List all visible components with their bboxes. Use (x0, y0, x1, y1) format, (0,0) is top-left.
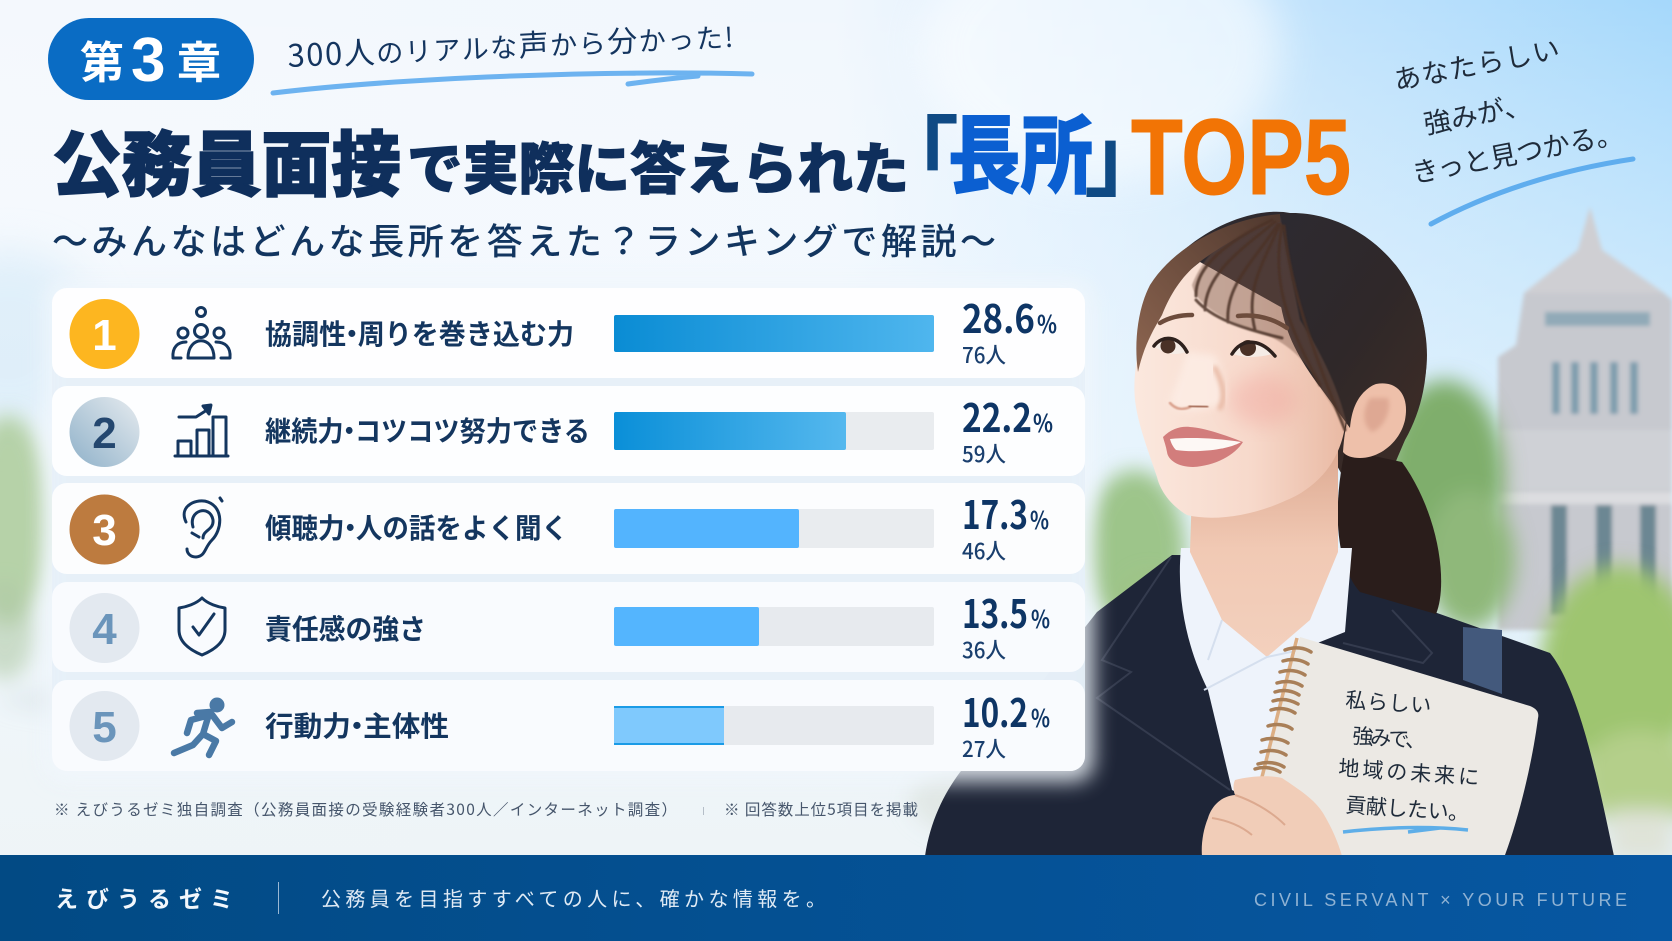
mouth (1163, 427, 1243, 467)
value: 10.2 (962, 683, 1028, 739)
footnotes: ※ 回答数上位5項目を掲載 (724, 798, 918, 820)
blazer (925, 555, 1614, 856)
chapter badge: 3 (131, 26, 165, 95)
main title: 」 (1084, 88, 1172, 215)
value (962, 388, 1053, 469)
subheading: 〜みんなはどんな長所を答えた？ランキングで解説〜 (52, 213, 996, 265)
tagline: 公務員を目指すすべての人に、確かな情報を。 (321, 883, 826, 912)
notebook spine (1262, 638, 1297, 777)
face (1134, 262, 1346, 518)
value: 17.3 (962, 485, 1028, 541)
value: % (1030, 501, 1049, 536)
value: % (1033, 404, 1053, 439)
nose shadow (1170, 352, 1224, 411)
ear (1343, 383, 1406, 458)
icon: bars (175, 405, 228, 456)
label: 協調性・周りを巻き込む力 (265, 313, 574, 353)
rank badge 3: 3 (92, 506, 117, 555)
rank badge 2 (70, 397, 140, 467)
rank badge 1 (70, 299, 140, 369)
handwritten subtitle: 300人のリアルな声から分かった! (286, 11, 734, 76)
notebook handwriting: 貢献したい。 (1345, 794, 1470, 826)
notebook spiral (1255, 648, 1311, 772)
label: 行動力・主体性 (265, 705, 449, 745)
bar (614, 412, 934, 450)
hand (1202, 776, 1342, 856)
rank badge 5 (70, 691, 140, 761)
woman holding notebook (925, 212, 1614, 856)
main title (52, 88, 1351, 217)
value: 46人 (962, 534, 1006, 566)
handwritten note top right: きっと見つかる。 (1409, 119, 1625, 189)
bar (614, 706, 934, 745)
brand name: えびうるゼミ (55, 880, 233, 914)
cheek blush (1229, 374, 1297, 426)
icon: ear (184, 498, 222, 557)
nose (1170, 368, 1223, 409)
notebook (1255, 637, 1538, 855)
notebook underline (1343, 828, 1468, 832)
main title: 「 (871, 88, 959, 215)
main title: TOP5 (1131, 96, 1351, 217)
icon: shield (179, 598, 225, 655)
handwritten subtitle (273, 11, 752, 93)
translucent bangs over forehead (1192, 216, 1348, 430)
ranking row 4 (52, 582, 1085, 672)
footer band (0, 855, 1672, 941)
ponytail (1338, 450, 1441, 614)
ear inner (1364, 398, 1389, 432)
footer english: CIVIL SERVANT × YOUR FUTURE (1254, 890, 1627, 910)
value: % (1037, 305, 1057, 340)
chapter badge: 第 (80, 27, 124, 91)
ranking row 2 (52, 386, 1085, 476)
ranking row 3 (52, 483, 1085, 574)
eyebrows (1160, 315, 1287, 328)
bang strands (1196, 220, 1345, 430)
value (962, 683, 1050, 764)
footnotes: ※ えびうるゼミ独自調査（公務員面接の受験経験者300人／インターネット調査） (54, 798, 677, 820)
collar shading (1204, 620, 1300, 690)
rank badge 3 (70, 494, 140, 564)
handwritten note top right: 強みが、 (1421, 90, 1533, 140)
lapels (1097, 557, 1432, 790)
chapter badge: 章 (177, 27, 221, 91)
notebook handwriting: 強みで、 (1352, 725, 1427, 753)
background trees left (0, 415, 1120, 840)
bar (614, 509, 934, 548)
rank badge 4: 4 (92, 605, 117, 654)
value: 28.6 (962, 289, 1035, 345)
value (962, 289, 1057, 370)
bar (614, 315, 934, 352)
chapter badge (48, 18, 254, 100)
value: % (1031, 699, 1050, 734)
hair crown and right mass (1276, 214, 1427, 428)
shirt (1180, 548, 1352, 805)
label: 責任感の強さ (265, 608, 426, 648)
main title: で実際に答えられた (407, 125, 909, 206)
hair left side (1136, 214, 1280, 372)
value (962, 485, 1049, 566)
value (962, 584, 1050, 665)
handwritten note top right: あなたらしい (1391, 34, 1562, 96)
notebook handwriting (1338, 689, 1480, 826)
notebook handwriting: 私らしい (1345, 689, 1432, 718)
icon: people (173, 308, 230, 358)
hair back (1137, 212, 1427, 480)
panel haze (44, 280, 1094, 782)
ranking row 5 (52, 680, 1085, 771)
value: 13.5 (962, 584, 1028, 640)
background building (1498, 207, 1672, 630)
eyes (1154, 338, 1275, 357)
value: 36人 (962, 633, 1006, 665)
label: 傾聴力・人の話をよく聞く (265, 507, 568, 547)
handwritten note top right (1391, 34, 1633, 224)
rank badge 1: 1 (92, 311, 117, 360)
bag strap (1463, 627, 1502, 694)
icon: runner (174, 698, 232, 755)
bar (614, 607, 934, 646)
rank badge 2: 2 (92, 409, 117, 458)
main title: 公務員面接 (52, 109, 401, 211)
value: 76人 (962, 338, 1006, 370)
rank badge 5: 5 (92, 703, 117, 752)
rank badge 4 (70, 593, 140, 663)
label: 継続力・コツコツ努力できる (265, 410, 590, 450)
background trees right (1085, 380, 1672, 860)
notebook handwriting: 地域の未来に (1338, 757, 1480, 790)
value: 22.2 (962, 388, 1032, 444)
value: % (1031, 600, 1050, 635)
neck (1190, 440, 1338, 657)
value: 59人 (962, 437, 1006, 469)
value: 27人 (962, 732, 1006, 764)
main title: 長所 (948, 88, 1093, 211)
ranking row 1 (52, 288, 1085, 378)
